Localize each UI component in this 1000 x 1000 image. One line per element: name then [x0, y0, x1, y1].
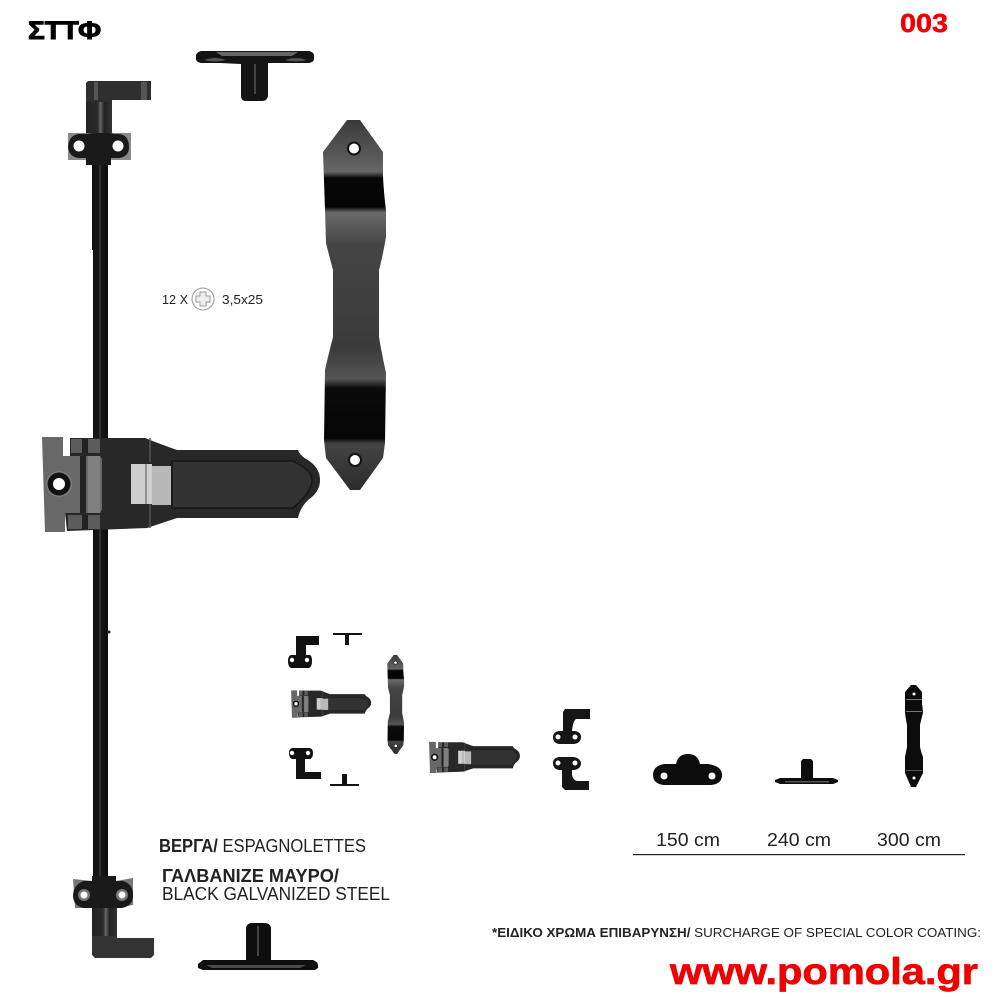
icon: screw head [192, 288, 214, 310]
text: finish in English: BLACK GALVANIZED STEEL [162, 884, 390, 904]
icon: espagnolette rod assembly [42, 81, 320, 958]
labels: rod lengths: 240 cm [767, 830, 831, 850]
icon: curved hook, lower [553, 757, 589, 790]
small plate bottom [330, 774, 359, 786]
icon: small kit, left column [288, 633, 371, 786]
number: page 003: 003 [900, 8, 948, 38]
label: screw count: 12 X [162, 292, 188, 307]
rod joint mark [108, 630, 110, 634]
icon: curved hook, upper [553, 709, 590, 744]
icon: bottom knob plate [198, 923, 318, 970]
icon: main handle [323, 120, 386, 490]
text: website: www.pomola.gr [669, 951, 978, 992]
icon: plate knob, side [775, 759, 838, 784]
icon: small handle [387, 655, 404, 754]
icon: narrow handle [905, 685, 923, 787]
title: product code: ΣΤΤΦ [28, 17, 101, 45]
top hook [86, 81, 151, 134]
heading: product name: ΒΕΡΓΑ/ ESPAGNOLETTES [159, 836, 366, 856]
small hook top [288, 636, 319, 668]
bottom hook [92, 908, 154, 958]
small plate top [333, 633, 362, 645]
labels: rod lengths: 300 cm [877, 830, 941, 850]
small latch [291, 690, 371, 718]
text: finish in Greek: ΓΑΛΒΑΝΙΖΕ ΜΑΥΡΟ/ [162, 866, 339, 886]
top bracket [68, 133, 131, 165]
labels: rod lengths: 150 cm [656, 830, 720, 850]
labels: rod lengths [656, 830, 941, 850]
small hook bottom [289, 748, 321, 779]
text: surcharge note: *ΕΙΔΙΚΟ ΧΡΩΜΑ ΕΠΙΒΑΡΥΝΣΗ/ SURCHARGE OF SPECIAL COLOR COATING: [492, 925, 981, 940]
rod [92, 165, 108, 880]
latch [42, 437, 320, 532]
icon: top knob plate [196, 51, 314, 101]
icon: medium latch [429, 742, 520, 773]
icon: oval plate knob, front [653, 754, 722, 785]
label: screw count [162, 288, 263, 310]
label: screw count: 3,5x25 [222, 292, 263, 307]
bottom bracket [73, 876, 133, 908]
